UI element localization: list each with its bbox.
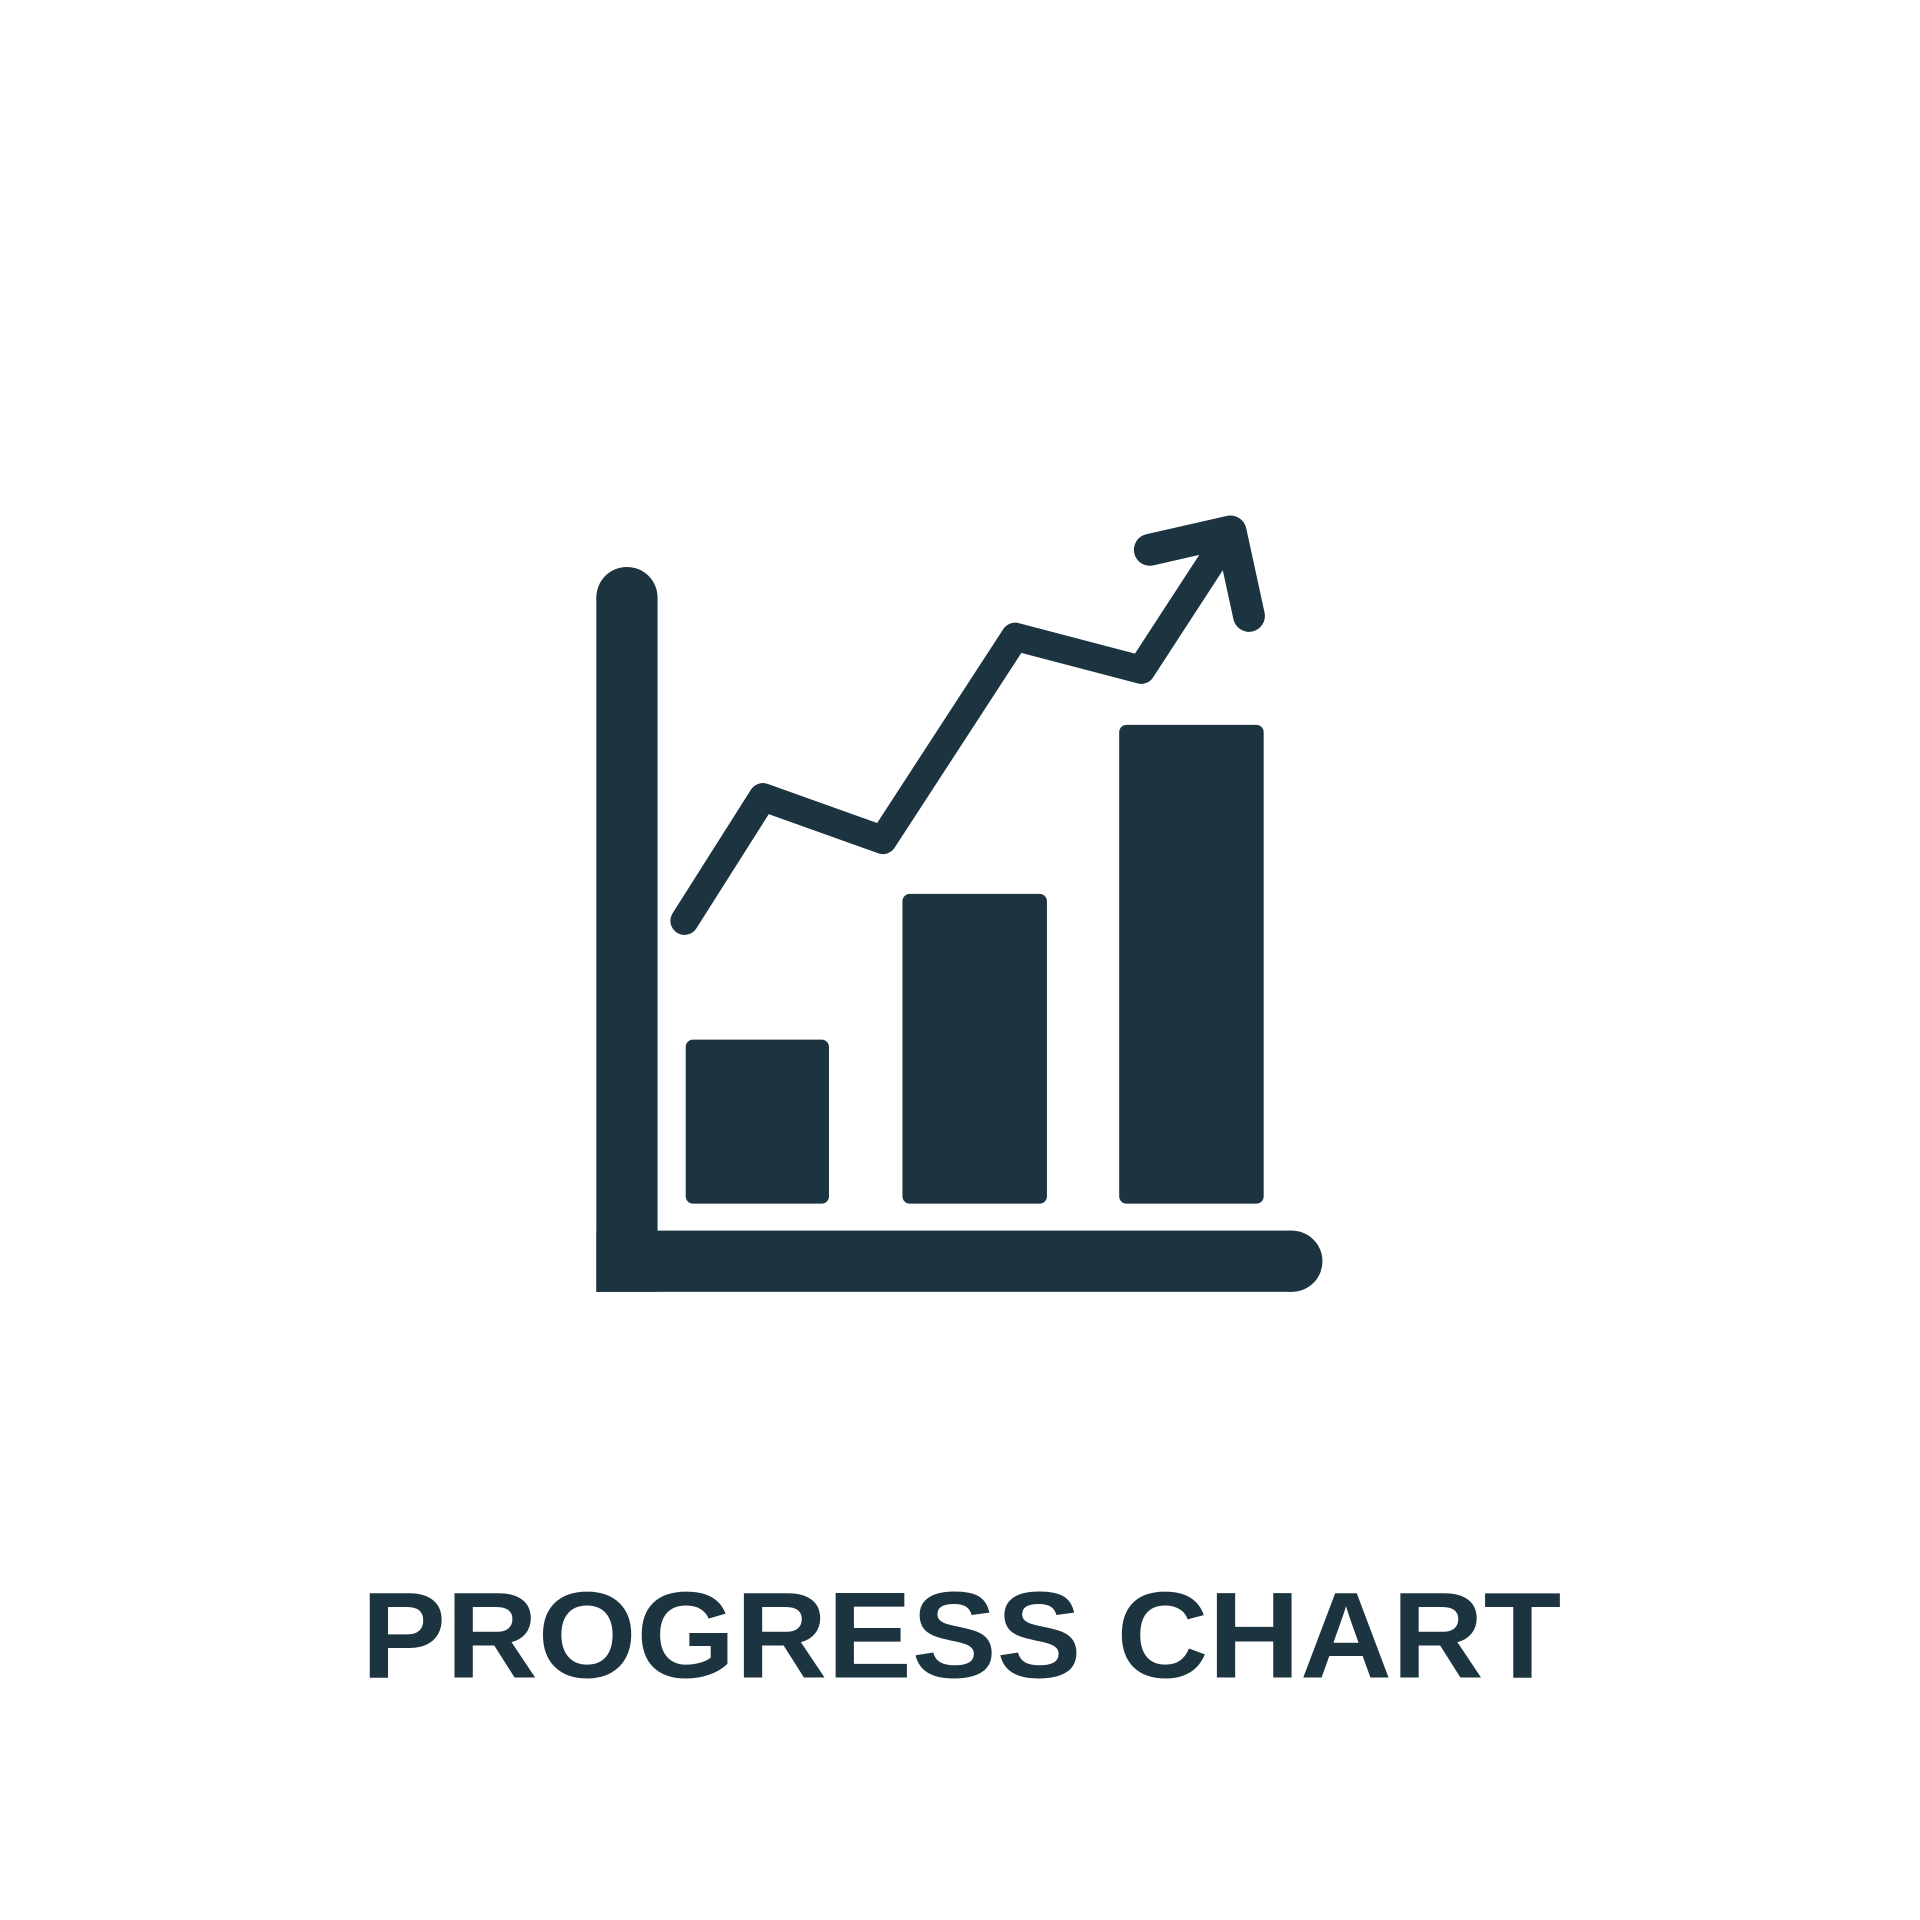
icon: chart axes [596,567,1322,1292]
title: PROGRESS CHART [361,1567,1561,1704]
icon: bars [686,725,1264,1204]
icon: rising trend arrow [684,531,1249,921]
